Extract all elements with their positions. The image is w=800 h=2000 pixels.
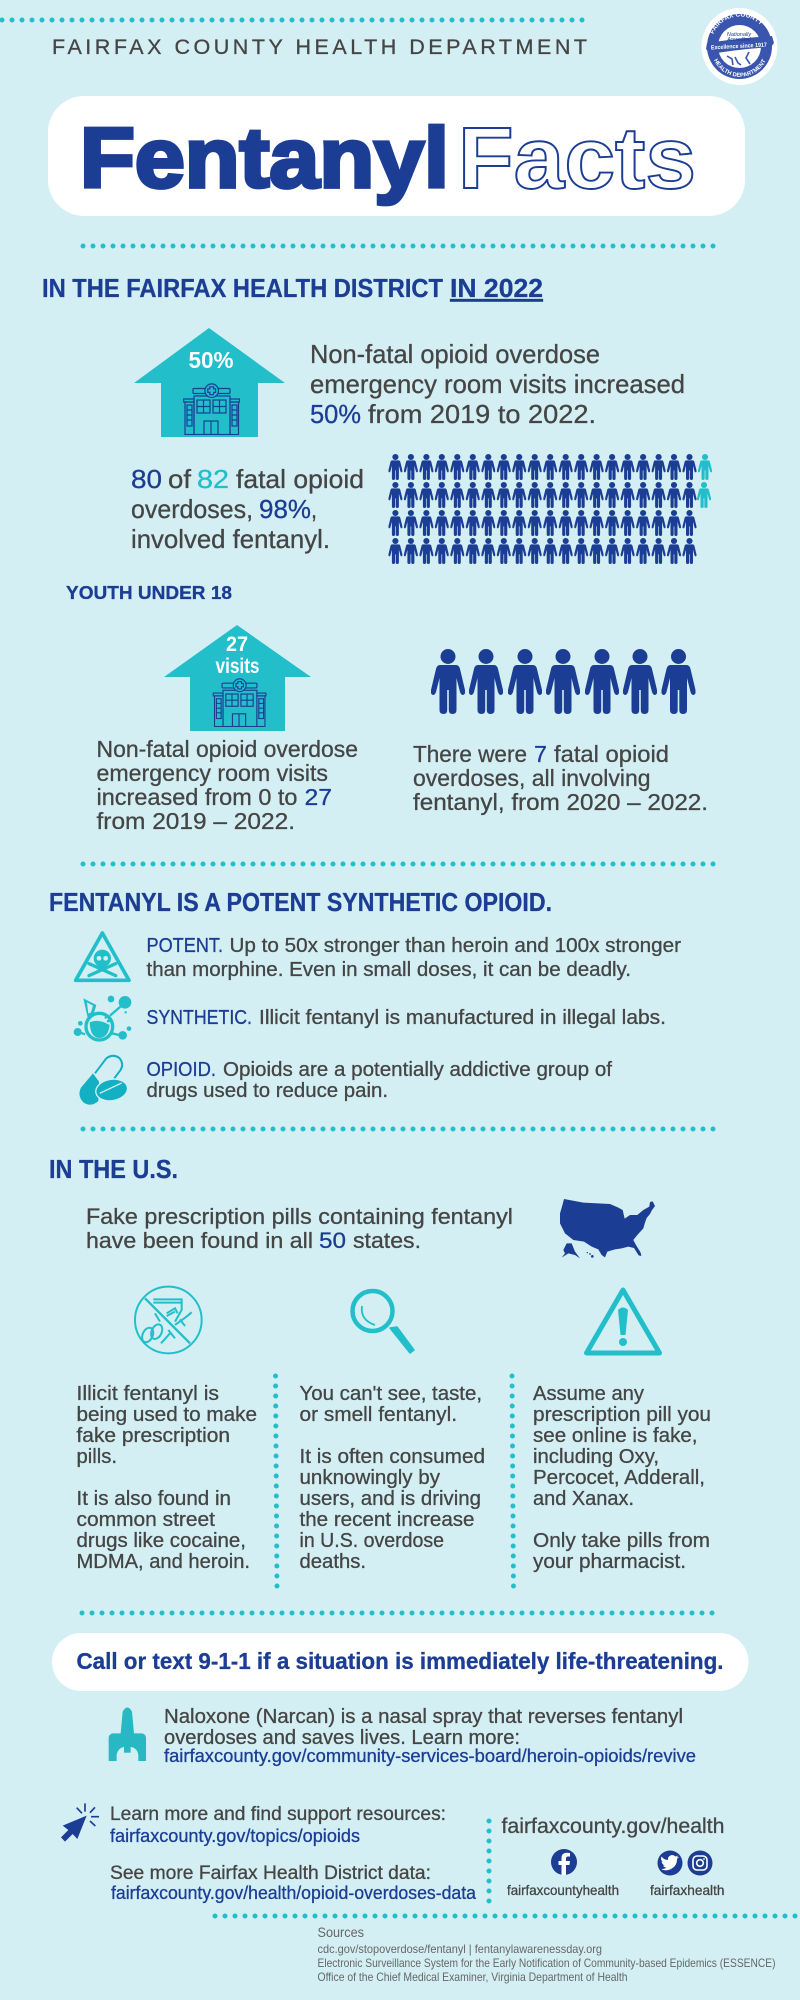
text: 80 of 82 fatal overdoses [131,464,364,554]
heading: in the U.S.: IN THE U.S. [49,1156,178,1184]
social media block: fairfaxcounty.gov/health [502,1815,724,1838]
column: can't see, taste or smell: users, and is driving [300,1488,481,1510]
text: fake pills in all 50 states: states. [353,1228,421,1253]
heading: potent synthetic opioid: FENTANYL IS A POTENT SYNTHETIC OPIOID. [49,889,552,917]
icon: no drugs [135,1287,202,1353]
icon: twitter [658,1850,682,1876]
text: naloxone: fairfaxcounty.gov/community-services-board/heroin-opioids/revive [164,1745,696,1766]
text: 80 of 82 fatal overdoses: fatal opioid [236,464,364,494]
text: 7 fatal overdoses: 7 [534,741,547,767]
text: potent: Up to 50x stronger than heroin and 100x stronger [230,935,681,957]
text: opioid: Opioids are a potentially addictive group of [223,1059,612,1081]
column: can't see, taste or smell: or smell fentanyl. [300,1404,457,1426]
column: assume any pill is fake [533,1383,711,1573]
column: illicit fentanyl: common street [76,1509,215,1531]
text: potent [146,935,681,981]
logo: health department seal: Nationally [727,32,752,38]
social media block: fairfaxhealth [650,1882,724,1898]
text: youth emergency room visits: increased from 0 to [96,784,298,810]
column: assume any pill is fake: Only take pills from [533,1530,710,1552]
text: fake pills in all 50 states: 50 [319,1228,346,1253]
text: youth emergency room visits: from 2019 – 2022. [96,808,295,834]
text: 80 of 82 fatal overdoses: , [311,494,317,524]
text: youth emergency room visits [96,736,358,834]
subheading: youth under 18: YOUTH UNDER 18 [66,582,232,603]
text: emergency room visits: emergency room visits increased [310,369,685,399]
column: assume any pill is fake: and Xanax. [533,1488,634,1510]
callout: call 9-1-1 [52,1633,748,1691]
text: 80 of 82 fatal overdoses: 82 [197,464,229,494]
text: fake pills in all 50 states [86,1204,513,1253]
text: opioid: OPIOID. [146,1059,216,1081]
icon: hospital [213,679,266,727]
text: youth emergency room visits: 27 [304,784,332,810]
map: United States [560,1199,655,1258]
text: learn more links: Learn more and find support resources: [110,1804,446,1825]
icon: magnifying glass [352,1291,414,1353]
logo: health department seal: FAIRFAX COUNTY [710,14,762,34]
column: illicit fentanyl: fake prescription [76,1425,230,1447]
text: emergency room visits: Non-fatal opioid overdose [310,339,600,369]
text: emergency room visits: from 2019 to 2022. [368,399,596,429]
text: synthetic: SYNTHETIC. [146,1007,252,1029]
text: 7 fatal overdoses: overdoses, all involving [413,765,650,791]
sources: cdc.gov/stopoverdose/fentanyl | fentanylawarenessday.org [318,1942,602,1956]
column: illicit fentanyl: being used to make [76,1404,257,1426]
text: 7 fatal overdoses: fatal opioid [554,741,669,767]
title word: Facts: Facts [458,110,696,207]
icon: warning triangle [586,1290,660,1353]
social media block [502,1815,724,1898]
column: can't see, taste or smell [300,1383,485,1573]
icon: pills [79,1056,129,1105]
icon: nasal spray [109,1707,146,1761]
column: illicit fentanyl: MDMA, and heroin. [76,1551,250,1573]
column: can't see, taste or smell: deaths. [300,1551,366,1573]
title word: Fentanyl: Fentanyl [80,111,449,205]
heading: fairfax health district: IN 2022 [450,273,543,303]
text: naloxone: Naloxone (Narcan) is a nasal spray that reverses fentanyl [164,1706,683,1728]
text: fake pills in all 50 states: Fake prescription pills containing fentanyl [86,1204,513,1229]
column: assume any pill is fake: see online is fake, [533,1425,698,1447]
text: opioid [146,1059,612,1102]
column: can't see, taste or smell: in U.S. overdose [300,1530,444,1552]
column: can't see, taste or smell: You can't see, taste, [300,1383,482,1405]
sources [318,1924,776,1984]
text: youth emergency room visits: emergency room visits [96,760,328,786]
column: can't see, taste or smell: the recent increase [300,1509,474,1531]
text: emergency room visits [310,339,685,429]
column: assume any pill is fake: prescription pill you [533,1404,711,1426]
sources: Office of the Chief Medical Examiner, Virginia Department of Health [318,1970,628,1984]
text: learn more links: fairfaxcounty.gov/health/opioid-overdoses-data [111,1882,477,1903]
column: assume any pill is fake: including Oxy, [533,1446,659,1468]
organization name: FAIRFAX COUNTY HEALTH DEPARTMENT [52,35,587,59]
logo: health department seal: Accredited [726,37,751,43]
text: opioid: drugs used to reduce pain. [146,1080,388,1102]
column: illicit fentanyl: drugs like cocaine, [76,1530,246,1552]
logo: health department seal: Excellence since 1917 [711,43,768,51]
column: illicit fentanyl: pills. [76,1446,117,1468]
column: illicit fentanyl [76,1383,257,1573]
pictogram: 7 people [431,649,696,714]
column: can't see, taste or smell: It is often consumed [300,1446,485,1468]
text: 80 of 82 fatal overdoses: 80 [131,464,162,494]
text: 80 of 82 fatal overdoses: involved fentanyl. [131,524,330,554]
pictogram: 82 people [388,454,712,564]
text: potent: than morphine. Even in small doses, it can be deadly. [146,959,631,981]
up arrow: 27 visits: visits [216,655,260,678]
text: naloxone: overdoses and saves lives. Learn more: [164,1727,520,1749]
text: 7 fatal overdoses: There were [413,741,527,767]
column: assume any pill is fake: your pharmacist. [533,1551,686,1573]
social media block: fairfaxcountyhealth [507,1882,619,1898]
column: assume any pill is fake: Assume any [533,1383,644,1405]
heading: fairfax health district: IN THE FAIRFAX HEALTH DISTRICT [42,273,443,303]
text: emergency room visits: 50% [310,399,361,429]
callout: call 9-1-1: Call or text 9-1-1 if a situation is immediately life-threatening. [76,1648,724,1674]
icon: instagram [688,1850,712,1876]
column: can't see, taste or smell: unknowingly by [300,1467,440,1489]
text: 7 fatal overdoses [413,741,708,815]
sources: Sources [318,1924,364,1940]
up arrow: 27 visits: 27 [226,633,248,656]
icon: lab flask [74,996,131,1040]
text: 7 fatal overdoses: fentanyl, from 2020 – 2022. [413,789,708,815]
icon: cursor click [61,1803,99,1842]
text: learn more links: See more Fairfax Health District data: [110,1863,431,1884]
column: illicit fentanyl: Illicit fentanyl is [76,1383,219,1405]
column: assume any pill is fake: Percocet, Adderall, [533,1467,705,1489]
text: 80 of 82 fatal overdoses: of [168,464,192,494]
icon: facebook [551,1849,577,1875]
text: learn more links: fairfaxcounty.gov/topics/opioids [110,1825,360,1846]
text: youth emergency room visits: Non-fatal opioid overdose [96,736,358,762]
up arrow: 50%: 50% [188,347,234,373]
text: fake pills in all 50 states: have been found in all [86,1228,313,1253]
up arrow: 50% [134,328,285,437]
icon: hospital [184,384,240,434]
text: learn more links [110,1804,477,1903]
icon: skull warning [76,933,129,980]
text: potent: POTENT. [146,935,223,957]
column: illicit fentanyl: It is also found in [76,1488,231,1510]
text: 80 of 82 fatal overdoses: overdoses, [131,494,253,524]
text: synthetic: Illicit fentanyl is manufactured in illegal labs. [259,1007,666,1029]
text: naloxone [164,1706,696,1766]
text: 80 of 82 fatal overdoses: 98% [259,494,311,524]
logo: health department seal: HEALTH DEPARTMENT [714,58,766,77]
logo: health department seal [702,8,778,85]
title panel [48,96,745,216]
up arrow: 27 visits [164,625,311,731]
